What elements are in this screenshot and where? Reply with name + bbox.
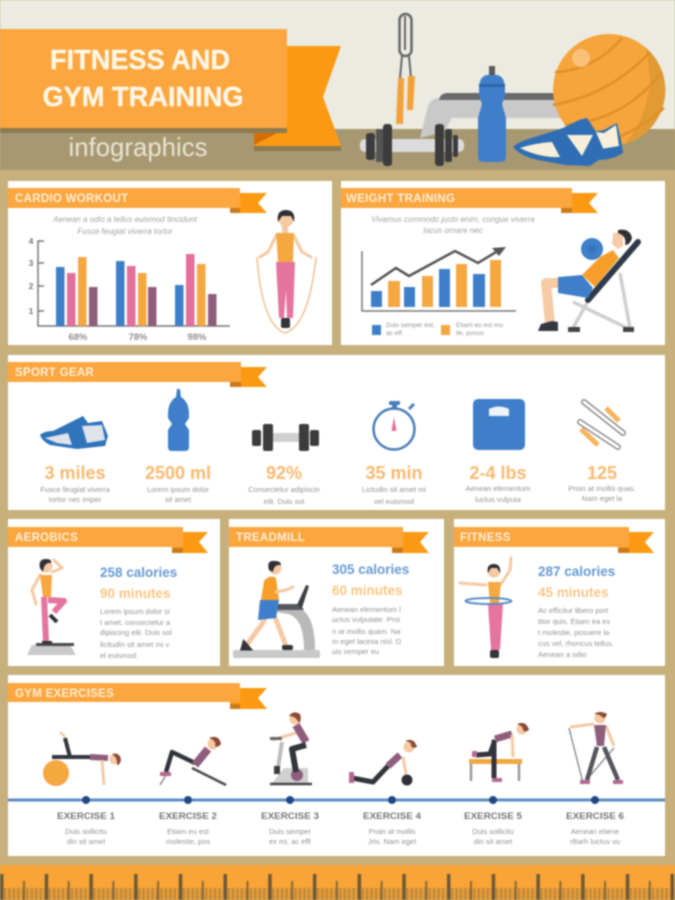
figure: exercise bike [270, 712, 312, 784]
exercise 4: Jris. Nam eget [368, 837, 417, 846]
exercise 3: EXERCISE 3 [261, 811, 319, 822]
rear shoe [592, 123, 623, 160]
bar chart: 2 [29, 281, 34, 291]
combo chart [362, 247, 516, 311]
description: t molestie, posuere la [538, 628, 610, 637]
figure: resistance band [569, 712, 623, 784]
item: stopwatch: 35 min [365, 463, 423, 483]
panel: cardio workout [8, 181, 332, 345]
legend: Duis semper est, [386, 322, 435, 329]
banner: sport gear: SPORT GEAR [15, 367, 94, 379]
exercise 2: Etiam eu est [167, 827, 210, 836]
ribbon band [0, 29, 287, 128]
figure: woman with jump rope [257, 210, 316, 333]
description [332, 605, 402, 656]
banner: treadmill [229, 527, 429, 553]
exercise 3: Duis semper [269, 827, 312, 836]
item: jump rope: 125 [587, 463, 617, 483]
figure: ball plank [43, 732, 121, 786]
description: n at mollis quam. Na [332, 627, 401, 636]
stat: minutes: 45 minutes [538, 585, 609, 600]
exercise 4: EXERCISE 4 [363, 811, 422, 822]
banner: gym exercises [8, 683, 267, 709]
bar chart: 68% [68, 332, 88, 343]
description: Ac efficitur libero port [538, 606, 609, 615]
icon: jump rope [396, 14, 415, 124]
intro text: Vivamus commodo justo enim, congue viverra [371, 215, 535, 224]
legend: lle, posuo [456, 330, 484, 337]
stat: calories: 305 calories [332, 562, 409, 577]
exercise 1: din sit amet [67, 837, 106, 846]
icon: dumbbell [252, 424, 319, 451]
item: shoe: Fusce feugiat viverra [40, 485, 111, 494]
banner: sport gear [8, 362, 267, 387]
icon: scale [473, 399, 525, 450]
figure: ab roller [349, 740, 417, 786]
icon: bottle [168, 389, 189, 451]
exercise 5: din sit amet [474, 837, 513, 846]
title: FITNESS AND [50, 44, 230, 75]
item: dumbbell: 92% [266, 463, 302, 483]
banner: fitness [454, 527, 654, 553]
stat: calories: 287 calories [538, 564, 615, 579]
bar chart: 98% [187, 332, 207, 343]
figure: woman with hula hoop [460, 558, 512, 658]
header scene [0, 0, 675, 170]
description [100, 607, 172, 660]
description: Lorem ipsum dolor si [100, 607, 170, 616]
description: el euismod [100, 651, 136, 660]
intro text: Aenean a odio a tellus euismod tincidunt [52, 215, 198, 224]
description: Aenean a odio [538, 650, 586, 659]
icon: stopwatch [374, 401, 414, 450]
measuring tape [0, 865, 675, 900]
description: licitudin sit amet mi v [100, 640, 169, 649]
legend: ac eff [386, 330, 402, 337]
exercise 3 [261, 712, 319, 846]
banner: treadmill: TREADMILL [236, 532, 305, 544]
exercise 3: ex mi, ac effi [269, 837, 311, 846]
figure: woman on step [27, 559, 76, 655]
item: shoe: 3 miles [44, 463, 106, 483]
item: water bottle: 2500 ml [145, 463, 211, 483]
item: water bottle: Lorem ipsum dolor [147, 485, 210, 494]
item: dumbbell: elit. Duis sol [264, 497, 305, 506]
exercise 6: Aenean etiene [571, 827, 619, 836]
panel: fitness [454, 519, 665, 666]
floor [0, 129, 675, 170]
exercise 2: molestie, pos [166, 837, 210, 846]
description: dipiscing elit. Duis sol [100, 628, 172, 637]
item: water bottle [145, 389, 211, 504]
banner: aerobics [8, 527, 208, 553]
legend: Etiam eu est mo [456, 322, 503, 329]
exercise 6: EXERCISE 6 [566, 811, 624, 822]
bar chart: 1 [29, 306, 34, 316]
timeline [8, 796, 665, 804]
stat: calories: 258 calories [100, 565, 177, 580]
item: jump rope: Nam eget la [582, 494, 623, 503]
exercise 6 [566, 712, 624, 846]
description [538, 606, 614, 659]
bar chart [29, 236, 230, 343]
banner: weight training: WEIGHT TRAINING [346, 193, 455, 205]
figure: man on incline bench [538, 230, 638, 332]
banner: aerobics: AEROBICS [15, 532, 78, 544]
panel: aerobics [8, 519, 220, 666]
item: scale: luctus vulputa [475, 495, 522, 504]
item: stopwatch: vel euismod [374, 497, 414, 506]
title ribbon [0, 29, 341, 162]
exercise 1: Duis sollicitu [65, 827, 107, 836]
exercise 5 [464, 723, 529, 846]
banner: fitness: FITNESS [460, 532, 511, 544]
icon: sneakers [513, 118, 623, 166]
subtitle: infographics [68, 132, 208, 162]
exercise 4 [349, 740, 422, 846]
wall [0, 0, 675, 129]
description: t amet, consectetur a [100, 618, 171, 627]
icon: weight bench [420, 93, 560, 138]
exercise 4: Proin at mollis [368, 827, 416, 836]
item: dumbbell: Consectetur adipiscin [248, 485, 320, 494]
front shoe [513, 118, 606, 166]
panel: sport gear [8, 355, 665, 510]
description: titor quis. Etiam ea es [538, 617, 610, 626]
bar chart: 78% [128, 332, 148, 343]
item: scale: 2-4 lbs [469, 463, 527, 483]
ribbon tail [254, 46, 341, 146]
bar chart: 4 [29, 236, 34, 246]
exercise 1 [43, 732, 121, 846]
item: shoe [40, 416, 111, 504]
item: jump rope [568, 402, 636, 503]
stat: minutes: 90 minutes [100, 586, 171, 601]
exercise 1: EXERCISE 1 [57, 811, 116, 822]
item: stopwatch [362, 401, 426, 506]
item: jump rope: Proin at mollis quas. [568, 484, 636, 493]
stat: minutes: 60 minutes [332, 583, 403, 598]
item: water bottle: sit amet [165, 495, 192, 504]
figure: man on treadmill [233, 561, 320, 658]
figure: sit-ups on incline bench [160, 737, 226, 785]
panel: weight training [341, 181, 665, 345]
item: scale [465, 399, 531, 504]
description: cus vel, rhoncus tellus. [538, 639, 614, 648]
icon: dumbbell [360, 124, 464, 166]
banner: weight training [341, 188, 598, 213]
intro text line 2: Fusce feugiat viverra tortor [77, 227, 173, 236]
description: m eget lacinia nisl. D [332, 637, 402, 646]
panel: gym exercises [8, 675, 665, 856]
legend [372, 322, 503, 337]
bar chart: 3 [29, 258, 34, 268]
banner: cardio workout [8, 188, 267, 213]
item: dumbbell [248, 424, 320, 506]
item: scale: Aenean elementum [465, 484, 531, 493]
icon: shoe [40, 416, 108, 449]
exercise 2 [159, 737, 226, 846]
banner: gym exercises: GYM EXERCISES [15, 688, 114, 700]
exercise 6: rBarh luctus vu [570, 837, 620, 846]
description: uis semper eu [332, 647, 379, 656]
icon: jump rope [580, 402, 623, 447]
icon: exercise ball [553, 34, 665, 146]
exercise 5: EXERCISE 5 [464, 811, 523, 822]
figure: dumbbell row on bench [469, 723, 529, 782]
item: shoe: tortor nec imper [49, 495, 102, 504]
item: stopwatch: Lictudin sit amet mi [362, 485, 426, 494]
title ribbon: GYM TRAINING [42, 81, 244, 112]
description: Aenean elementum l [332, 605, 401, 614]
exercise 5: Duis sollicitu [472, 827, 514, 836]
description: uctus vulputate. Proi [332, 615, 400, 624]
banner: cardio workout: CARDIO WORKOUT [15, 193, 128, 205]
intro text line 2: lacus ornare nec [423, 226, 483, 235]
icon: water bottle [478, 66, 506, 162]
exercise 2: EXERCISE 2 [159, 811, 217, 822]
panel: treadmill [229, 519, 444, 666]
